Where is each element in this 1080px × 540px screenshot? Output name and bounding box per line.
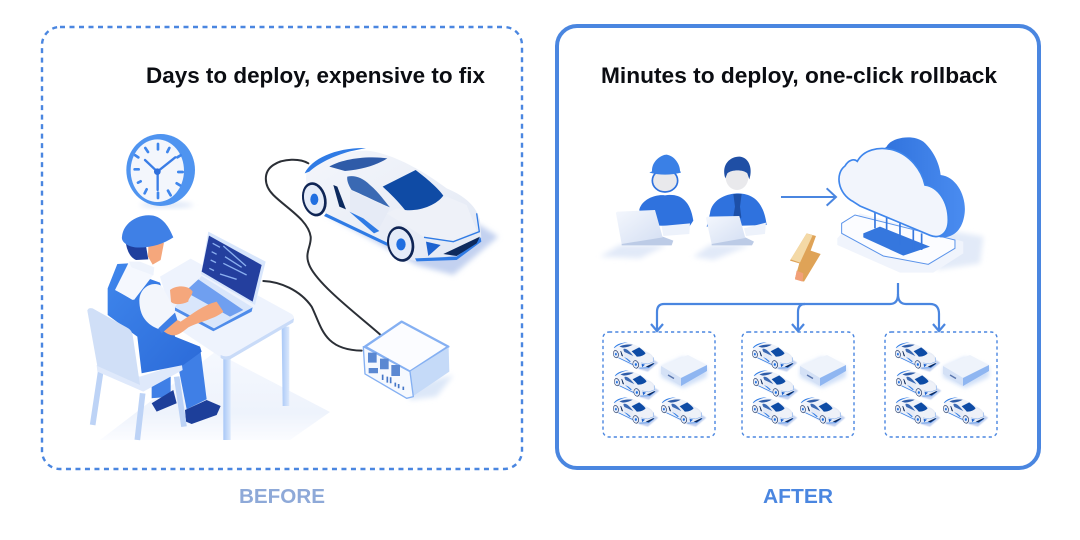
illustration: floor shadow: [100, 352, 330, 440]
illustration: cloud platform: [837, 137, 983, 273]
illustration: connected car: [298, 148, 498, 275]
arrow: cloud to vehicle fleets: [651, 283, 945, 331]
icon: wall clock: [126, 134, 195, 208]
illustration: control unit box: [363, 322, 453, 400]
label: after: AFTER: [763, 485, 833, 508]
illustration: engineer with helmet: [600, 155, 693, 258]
group: fleet 3: [885, 332, 997, 437]
group: fleet 2: [742, 332, 854, 437]
icon: lightning bolt: [790, 233, 821, 282]
chair back: [87, 308, 140, 385]
panel: before: [42, 27, 522, 469]
table: [160, 259, 294, 440]
worker torso and arms: [108, 215, 223, 373]
illustration: manager with tie: [693, 157, 767, 260]
group: fleet 1: [603, 332, 715, 437]
illustration: worker at desk: [87, 215, 294, 440]
icon: cables: [263, 160, 381, 351]
heading: after panel: Minutes to deploy, one-click rollback: [601, 63, 998, 88]
arrow: engineers to cloud: [781, 188, 836, 206]
panel: after: [557, 26, 1039, 468]
label: before: BEFORE: [239, 485, 325, 508]
laptop: [175, 232, 266, 331]
worker legs and shoes: [152, 347, 221, 424]
chair seat and legs: [93, 363, 184, 440]
heading: before panel: Days to deploy, expensive to fix: [146, 63, 486, 88]
